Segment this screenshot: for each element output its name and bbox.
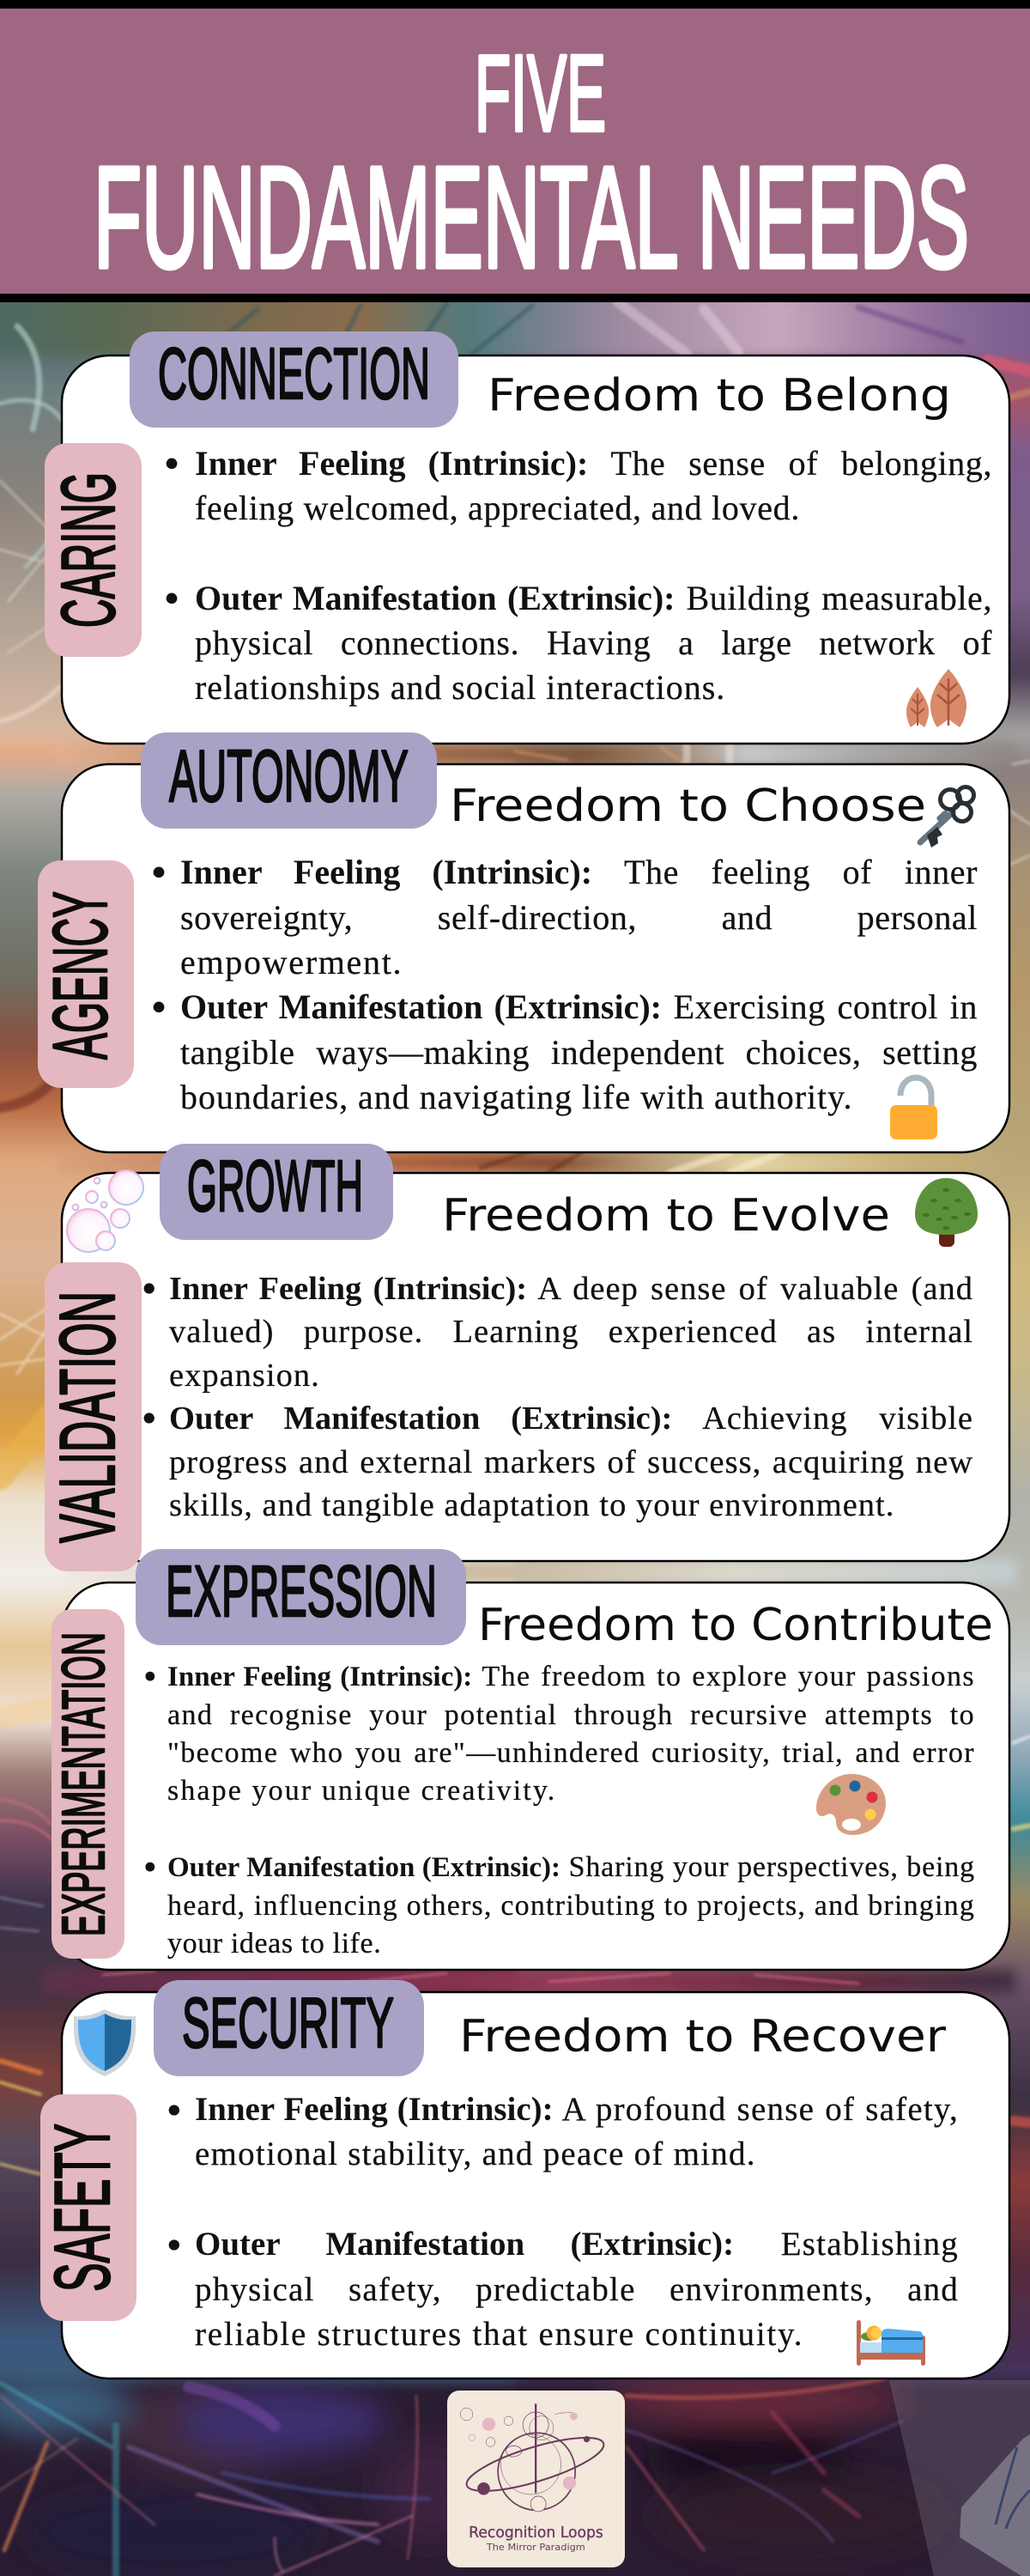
icon: bubbles xyxy=(67,1170,143,1252)
text block: autonomy definitions: Outer Manifestation (Extrinsic): Exercising control in xyxy=(180,987,978,1026)
side label: agency: AGENCY xyxy=(37,891,123,1060)
heading tab: security xyxy=(154,1980,424,2076)
heading tab: autonomy xyxy=(141,732,437,829)
icon: leaves xyxy=(906,669,966,727)
subtitle: freedom to choose: Freedom to Choose xyxy=(450,781,926,832)
heading tab: autonomy: AUTONOMY xyxy=(169,736,409,817)
icon: shield xyxy=(74,2009,136,2076)
panel: security: • xyxy=(167,2223,181,2266)
subtitle: freedom to recover: Freedom to Recover xyxy=(459,2011,947,2063)
side label: validation: VALIDATION xyxy=(45,1291,131,1543)
text block: autonomy definitions: boundaries, and navigating life with authority. xyxy=(180,1078,852,1116)
text block: security definitions: reliable structures that ensure continuity. xyxy=(195,2316,803,2353)
text block: growth definitions: progress and external markers of success, acquiring new xyxy=(169,1444,973,1480)
text block: connection definitions: feeling welcomed, appreciated, and loved. xyxy=(195,488,800,527)
text block: expression definitions: heard, influencing others, contributing to projects, and bringing xyxy=(167,1890,975,1922)
panel: growth: • xyxy=(142,1267,156,1309)
text block: expression definitions xyxy=(144,1658,975,1959)
text block: security definitions: Inner Feeling (Intrinsic): A profound sense of safety, xyxy=(195,2090,959,2128)
header band xyxy=(0,0,1030,302)
text block: connection definitions: physical connections. Having a large network of xyxy=(195,623,992,661)
icon: tree xyxy=(915,1178,978,1247)
subtitle: freedom to belong: Freedom to Belong xyxy=(488,370,951,422)
text block: growth definitions: skills, and tangible adaptation to your environment. xyxy=(169,1487,894,1523)
side label: caring xyxy=(45,443,142,657)
side label: safety xyxy=(39,2094,136,2321)
panel: autonomy: • xyxy=(152,985,166,1029)
text block: expression definitions: Outer Manifestation (Extrinsic): Sharing your perspectives, being xyxy=(167,1851,975,1883)
panel: autonomy: • xyxy=(152,850,166,894)
heading tab: expression: EXPRESSION xyxy=(166,1551,437,1631)
text block: expression definitions: Inner Feeling (Intrinsic): The freedom to explore your passions xyxy=(167,1661,975,1692)
text block: expression definitions: your ideas to life. xyxy=(167,1928,381,1959)
heading tab: connection: CONNECTION xyxy=(158,333,430,414)
panel: expression: • xyxy=(144,1849,156,1886)
side label: validation xyxy=(45,1262,142,1571)
background blobs for bottom band xyxy=(0,2373,944,2576)
text block: autonomy definitions xyxy=(152,850,978,1116)
panel: autonomy xyxy=(37,732,1011,1154)
heading tab: expression xyxy=(136,1549,466,1645)
text block: connection definitions xyxy=(165,441,992,707)
text block: connection definitions: Outer Manifestation (Extrinsic): Building measurable, xyxy=(195,579,992,617)
title: FIVE xyxy=(475,33,606,154)
text block: connection definitions: Inner Feeling (Intrinsic): The sense of belonging, xyxy=(195,443,992,483)
text block: security definitions: physical safety, predictable environments, and xyxy=(195,2270,959,2308)
heading tab: growth: GROWTH xyxy=(187,1145,363,1226)
panel: security: • xyxy=(167,2088,181,2131)
text block: growth definitions: valued) purpose. Learning experienced as internal xyxy=(169,1314,973,1350)
icon: open padlock xyxy=(890,1078,937,1139)
logo wordmark xyxy=(469,2524,603,2553)
text block: connection definitions: relationships and social interactions. xyxy=(195,668,725,706)
side label: caring: CARING xyxy=(45,472,130,628)
text block: autonomy definitions: empowerment. xyxy=(180,943,403,981)
panel: connection: • xyxy=(165,441,179,484)
panel: expression xyxy=(42,1549,1011,2330)
subtitle: freedom to contribute: Freedom to Contribute xyxy=(478,1600,993,1651)
text block: autonomy definitions: tangible ways—making independent choices, setting xyxy=(180,1033,978,1072)
panel: connection: • xyxy=(165,575,179,620)
text block: growth definitions: Inner Feeling (Intrinsic): A deep sense of valuable (and xyxy=(169,1271,973,1307)
side label: experimentation xyxy=(50,1609,124,1959)
text block: growth definitions xyxy=(142,1267,973,1523)
side label: experimentation: EXPERIMENTATION xyxy=(50,1632,117,1936)
text block: security definitions: Outer Manifestation (Extrinsic): Establishing xyxy=(195,2226,959,2263)
text block: growth definitions: Outer Manifestation (Extrinsic): Achieving visible xyxy=(169,1400,973,1437)
text block: autonomy definitions: Inner Feeling (Intrinsic): The feeling of inner xyxy=(180,853,978,891)
bottom light streaks xyxy=(0,2383,112,2447)
text block: expression definitions: shape your unique creativity. xyxy=(167,1775,556,1807)
subtitle: freedom to evolve: Freedom to Evolve xyxy=(442,1190,890,1242)
title xyxy=(94,33,969,298)
icon: key xyxy=(920,787,973,848)
heading tab: security: SECURITY xyxy=(182,1983,394,2063)
icon: palette xyxy=(816,1774,886,1835)
text block: growth definitions: expansion. xyxy=(169,1358,320,1394)
logo: recognition loops badge xyxy=(447,2391,625,2567)
text block: autonomy definitions: sovereignty, self-direction, and personal xyxy=(180,898,978,937)
panel: growth xyxy=(45,1144,1011,1571)
side label: safety: SAFETY xyxy=(39,2123,126,2292)
logo wordmark: The Mirror Paradigm xyxy=(486,2542,585,2553)
heading tab: growth xyxy=(160,1144,393,1240)
icon: bed xyxy=(857,2320,925,2366)
panel: connection xyxy=(38,331,1011,2363)
text block: expression definitions: "become who you are"—unhindered curiosity, trial, and error xyxy=(167,1737,975,1769)
logo wordmark: Recognition Loops xyxy=(469,2524,603,2542)
side label: agency xyxy=(37,860,134,1088)
text block: security definitions xyxy=(167,2088,959,2353)
panel: growth: • xyxy=(142,1397,156,1439)
heading tab: connection xyxy=(130,331,458,428)
panel: security xyxy=(39,1980,1011,2380)
text block: security definitions: emotional stability, and peace of mind. xyxy=(195,2136,756,2172)
panel: expression: • xyxy=(144,1658,156,1695)
text block: expression definitions: and recognise your potential through recursive attempts to xyxy=(167,1699,975,1731)
background: translucent pale shard at lower right xyxy=(889,2380,1030,2576)
logo emblem xyxy=(460,2403,609,2512)
